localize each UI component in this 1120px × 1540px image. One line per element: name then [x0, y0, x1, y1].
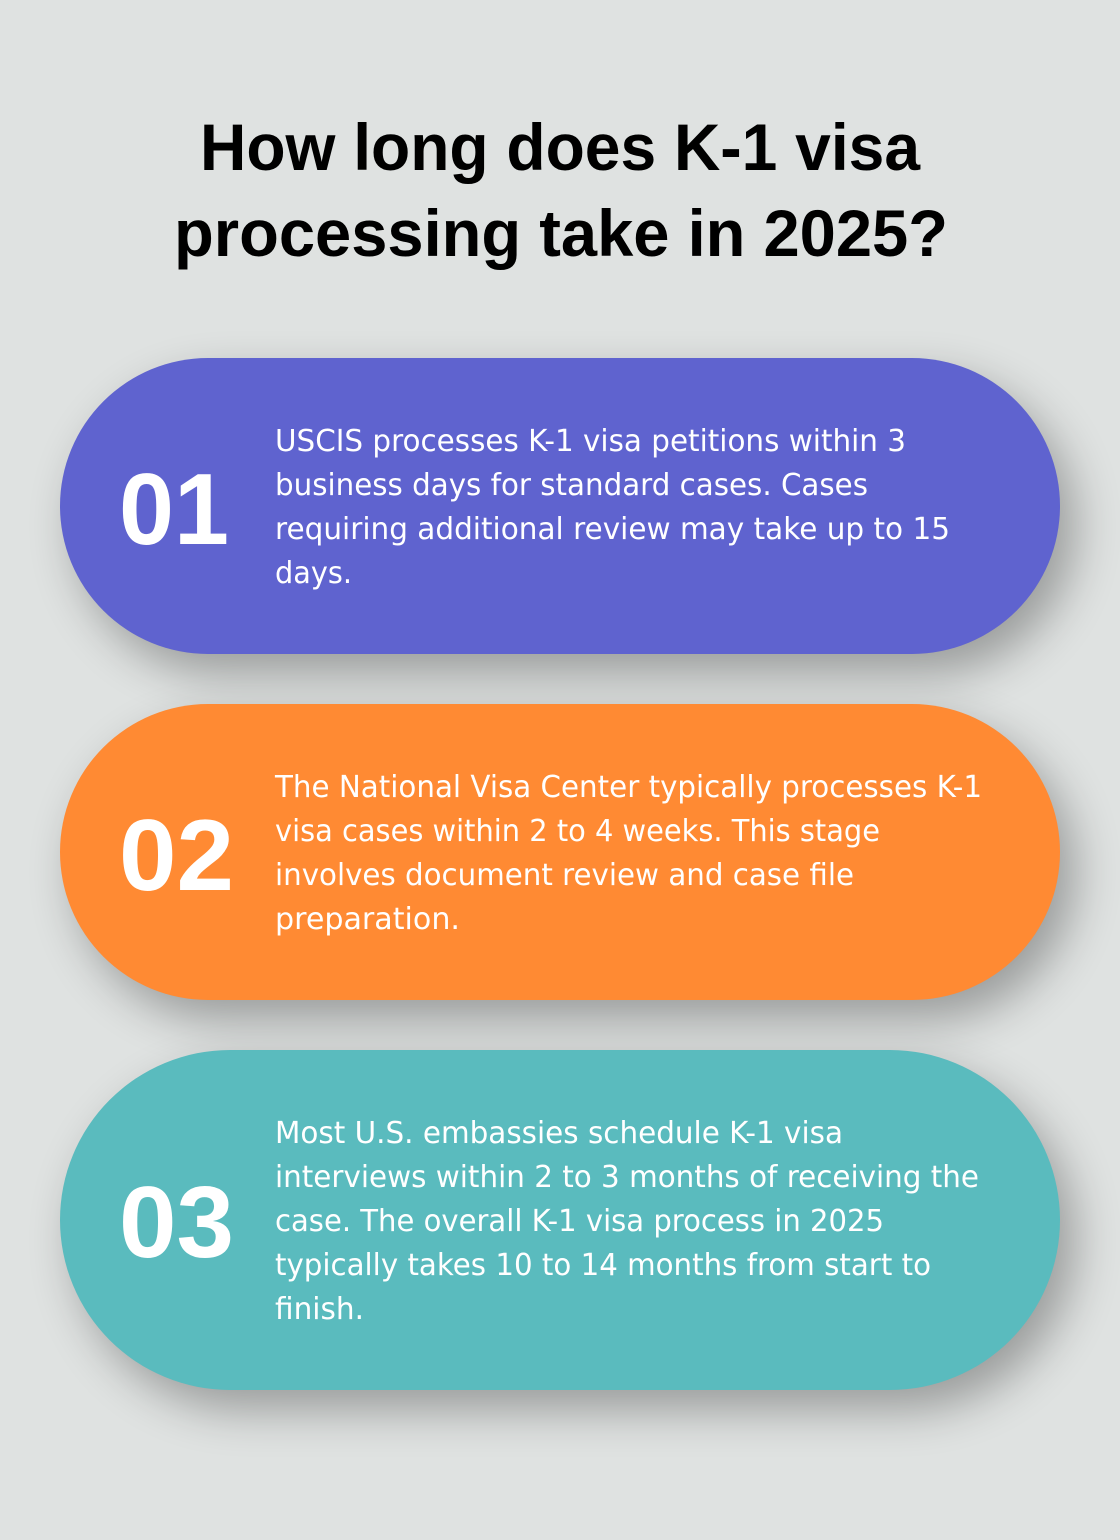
panel: step 03 embassy interviews	[60, 1050, 1060, 1390]
text block: step 03 description	[275, 1116, 979, 1327]
text block: step 01 description: days.	[275, 556, 352, 591]
text block: step 02 description: involves document review and case file	[275, 858, 854, 893]
text block: step 02 description: The National Visa Center typically processes K-1	[274, 770, 982, 805]
text block: step 01 description: business days for standard cases. Cases	[275, 468, 868, 503]
text block: step 03 description: finish.	[275, 1292, 364, 1327]
title	[174, 110, 948, 270]
text block: step 03 description: Most U.S. embassies schedule K-1 visa	[275, 1116, 843, 1151]
text block: step 02 description	[274, 770, 982, 937]
text block: step 01 description: requiring additional review may take up to 15	[275, 512, 950, 547]
text block: step 03 description: typically takes 10 to 14 months from start to	[275, 1248, 931, 1283]
panel: step 02 National Visa Center	[60, 704, 1060, 1000]
title: processing take in 2025?	[174, 196, 948, 270]
text block: step 01 description: USCIS processes K-1 visa petitions within 3	[275, 424, 906, 459]
text block: step 02 description: preparation.	[275, 902, 460, 937]
text block: step 03 description: case. The overall K-1 visa process in 2025	[275, 1204, 884, 1239]
panel: step 01 USCIS	[60, 358, 1060, 654]
title: How long does K-1 visa	[200, 110, 921, 184]
text block: step 02 description: visa cases within 2 to 4 weeks. This stage	[275, 814, 880, 849]
number 03: 03	[119, 1167, 234, 1279]
text block: step 03 description: interviews within 2 to 3 months of receiving the	[275, 1160, 979, 1195]
number 02: 02	[119, 800, 234, 912]
number 01: 01	[119, 454, 229, 566]
text block: step 01 description	[275, 424, 950, 591]
